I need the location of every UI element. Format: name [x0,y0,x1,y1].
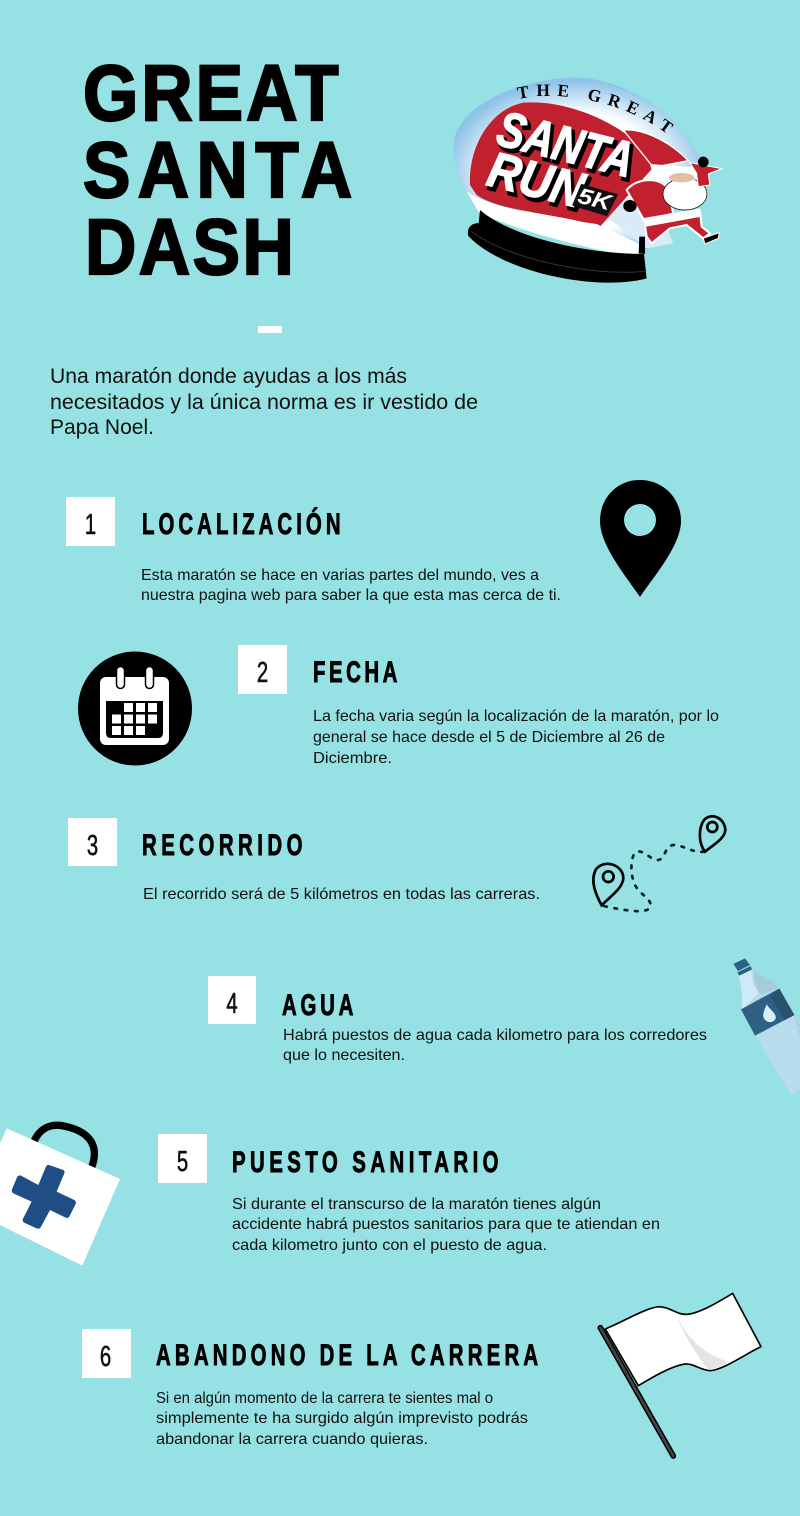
heading 2: FECHA [313,656,397,689]
title: GREAT [83,49,339,137]
text 6: abandonar la carrera cuando quieras. [156,1431,428,1448]
number box 2: 2 [257,657,268,689]
number box 5 [158,1134,207,1183]
text 4: que lo necesiten. [283,1047,405,1064]
number box 2 [238,645,287,694]
section 3: recorrido [68,818,540,903]
section 2: fecha [238,645,719,767]
text 4 [283,1027,707,1064]
logo: The Great Santa Run 5K snow globe: RUN [485,145,593,223]
intro text: necesitados y la única norma es ir vestido de [50,391,478,414]
section 4: agua [208,976,707,1064]
icon: route with two pins [593,816,725,911]
heading 5: PUESTO SANITARIO [232,1146,499,1179]
text 6: Si en algún momento de la carrera te sientes mal o [156,1390,493,1407]
number box 4 [208,976,256,1024]
text 1: Esta maratón se hace en varias partes del mundo, ves a [141,567,539,584]
text 2 [313,708,719,767]
logo: The Great Santa Run 5K snow globe [453,78,724,283]
text 5 [232,1196,660,1254]
heading 1: LOCALIZACIÓN [142,506,341,541]
decorative white dash [258,326,282,333]
section 6: abandono de la carrera [82,1329,538,1448]
text 4: Habrá puestos de agua cada kilometro para los corredores [283,1027,707,1044]
intro text: Papa Noel. [50,416,154,439]
number box 6 [82,1329,131,1378]
text 1 [141,567,561,604]
logo: The Great Santa Run 5K snow globe: RUN [482,141,590,219]
number box 1 [66,497,115,546]
section 5: puesto sanitario [158,1134,660,1254]
text 2: La fecha varia según la localización de la maratón, por lo [313,708,719,725]
text 6: simplemente te ha surgido algún imprevisto podrás [156,1410,528,1427]
title [83,49,352,291]
logo: The Great Santa Run 5K snow globe: THE GREAT [516,84,674,133]
number box 1: 1 [85,509,96,541]
text 6 [156,1390,528,1448]
text 2: Diciembre. [313,750,392,767]
icon: water bottle [733,958,800,1096]
logo: The Great Santa Run 5K snow globe: 5K [575,183,616,216]
number box 5: 5 [177,1146,188,1178]
logo: The Great Santa Run 5K snow globe: SANTA [494,104,642,192]
heading 3: RECORRIDO [142,829,302,862]
icon: white flag [600,1293,761,1456]
icon: map pin [600,480,681,597]
number box 3 [68,818,117,866]
icon: calendar [78,652,192,766]
intro text: Una maratón donde ayudas a los más [50,365,407,388]
text 2: general se hace desde el 5 de Diciembre al 26 de [313,729,665,746]
title: SANTA [83,126,352,214]
heading 4: AGUA [282,989,353,1022]
logo: The Great Santa Run 5K snow globe: SANTA [492,100,639,188]
text 5: Si durante el transcurso de la maratón tienes algún [232,1196,601,1213]
intro text [50,365,478,439]
text 5: cada kilometro junto con el puesto de agua. [232,1237,547,1254]
number box 4: 4 [226,988,238,1020]
heading 6: ABANDONO DE LA CARRERA [156,1339,538,1372]
icon: first aid kit [0,1125,120,1266]
text 5: accidente habrá puestos sanitarios para que te atiendan en [232,1216,660,1233]
section 1: localización [66,497,561,604]
text 1: nuestra pagina web para saber la que esta mas cerca de ti. [141,587,561,604]
text 3: El recorrido será de 5 kilómetros en todas las carreras. [143,886,540,903]
number box 3: 3 [87,830,98,862]
number box 6: 6 [100,1341,111,1373]
title: DASH [85,203,294,291]
